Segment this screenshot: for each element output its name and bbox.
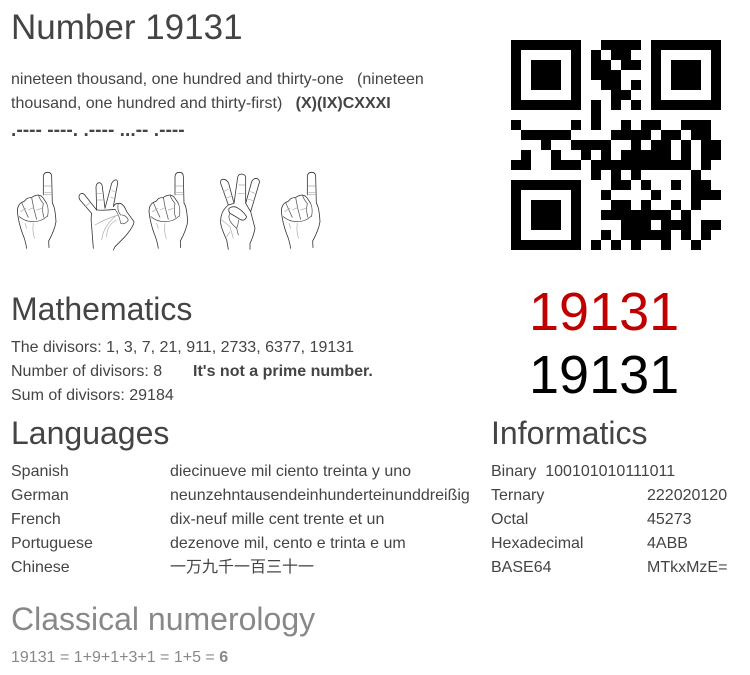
text: number in words: nineteen thousand, one hundred and thirty-one (nineteen <box>11 71 424 88</box>
table: languages: dix-neuf mille cent trente et un <box>170 511 384 528</box>
table: languages: diecinueve mil ciento treinta y uno <box>170 463 411 480</box>
table: informatics: Ternary <box>491 487 544 504</box>
table: informatics: 45273 <box>647 511 692 528</box>
table: informatics <box>491 463 727 576</box>
icon: sign language hands <box>16 172 320 250</box>
title: Number 19131 <box>11 8 243 47</box>
table: languages <box>11 463 470 576</box>
number in red: 19131 <box>529 282 679 342</box>
table: informatics: BASE64 <box>491 559 551 576</box>
text: sum of divisors: Sum of divisors: 29184 <box>11 387 174 404</box>
table: languages: Chinese <box>11 559 70 576</box>
table: languages: dezenove mil, cento e trinta e um <box>170 535 406 552</box>
heading: mathematics: Mathematics <box>11 291 192 327</box>
text: numerology sum: 19131 = 1+9+1+3+1 = 1+5 = 6 <box>11 649 228 666</box>
heading: informatics: Informatics <box>491 415 647 451</box>
heading: languages: Languages <box>11 415 169 451</box>
hand: three fingers and thumb <box>221 174 259 249</box>
text: morse code: .---- ----. .---- ...-- .---- <box>11 120 185 141</box>
hand: nine <box>79 180 134 250</box>
text: prime status: It's not a prime number. <box>193 363 373 380</box>
hand: one <box>281 172 320 248</box>
table: informatics: Binary 100101010111011 <box>491 463 675 480</box>
table: languages: Spanish <box>11 463 69 480</box>
table: informatics: 222020120 <box>647 487 727 504</box>
hand: one <box>17 172 56 248</box>
table: languages: Portuguese <box>11 535 93 552</box>
table: informatics: Octal <box>491 511 528 528</box>
text: number in words: thousand, one hundred and thirty-first) (X)(IX)CXXXI <box>11 95 391 112</box>
table: languages: 一万九千一百三十一 <box>170 559 314 576</box>
text: number in words <box>11 71 424 112</box>
text: number of divisors: Number of divisors: 8 <box>11 363 162 380</box>
table: informatics: MTkxMzE= <box>647 559 727 576</box>
text: divisors: The divisors: 1, 3, 7, 21, 911, 2733, 6377, 19131 <box>11 339 354 356</box>
table: informatics: 4ABB <box>647 535 688 552</box>
number in black: 19131 <box>529 345 679 405</box>
qr code <box>511 40 721 250</box>
heading: classical numerology: Classical numerology <box>11 601 315 637</box>
table: languages: German <box>11 487 69 504</box>
hand: one <box>149 172 188 248</box>
table: languages: French <box>11 511 61 528</box>
table: informatics: Hexadecimal <box>491 535 583 552</box>
table: languages: neunzehntausendeinhunderteinunddreißig <box>170 487 470 504</box>
